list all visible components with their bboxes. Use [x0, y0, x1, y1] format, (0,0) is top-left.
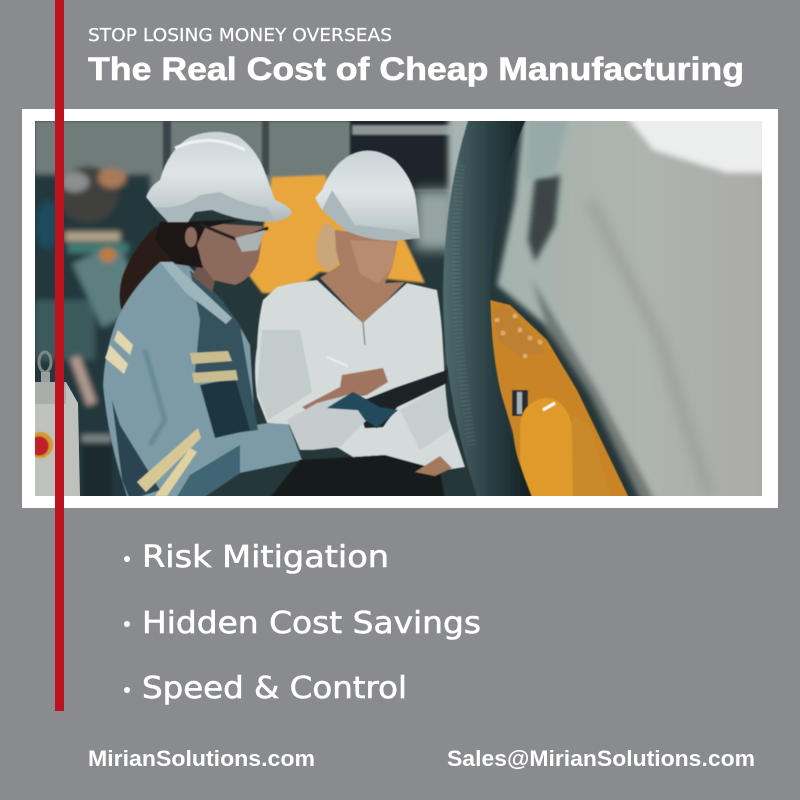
- dark skirt: [268, 455, 445, 500]
- pen: [327, 357, 348, 366]
- bullet: risk mitigation: Risk Mitigation: [142, 540, 389, 575]
- high-visibility jacket: [103, 262, 302, 500]
- red vertical bar: [55, 0, 64, 711]
- photo backdrop: factory wall: [35, 121, 643, 496]
- blue glove palm: [327, 392, 398, 428]
- blonde hair: [315, 222, 340, 272]
- hair: [155, 220, 240, 268]
- right foreground: blurred white fabric: [494, 121, 762, 496]
- title: The Real Cost of Cheap Manufacturing: [88, 51, 744, 87]
- writing hand and forearm: [302, 368, 388, 410]
- orange robot arm behind the women: [243, 175, 425, 293]
- bullet: speed and control: Speed & Control: [142, 671, 407, 706]
- email: Sales@MirianSolutions.com: [447, 746, 755, 771]
- ponytail: [119, 226, 173, 310]
- grey control box with red button: [35, 350, 80, 496]
- blurred machinery, left: [35, 164, 154, 496]
- face: [196, 223, 263, 286]
- tablet: [357, 370, 447, 428]
- orange machine, right: [490, 300, 630, 500]
- woman on left: [103, 132, 302, 500]
- website: MirianSolutions.com: [88, 746, 315, 771]
- photo: two engineers in hard hats with tablet: [35, 121, 762, 496]
- safety glasses: [200, 224, 268, 252]
- white photo frame: [22, 109, 778, 508]
- subtitle: STOP LOSING MONEY OVERSEAS: [88, 26, 392, 46]
- white blouse: [255, 280, 465, 472]
- work glove: [287, 395, 375, 450]
- white hard hat: [146, 132, 292, 222]
- woman on right: [255, 151, 465, 500]
- bullet: hidden cost savings: Hidden Cost Savings: [142, 606, 481, 641]
- corrugated hose: [443, 115, 535, 505]
- white hard hat: [315, 151, 420, 241]
- face and neck: [320, 230, 405, 324]
- left hand at hip: [415, 456, 452, 476]
